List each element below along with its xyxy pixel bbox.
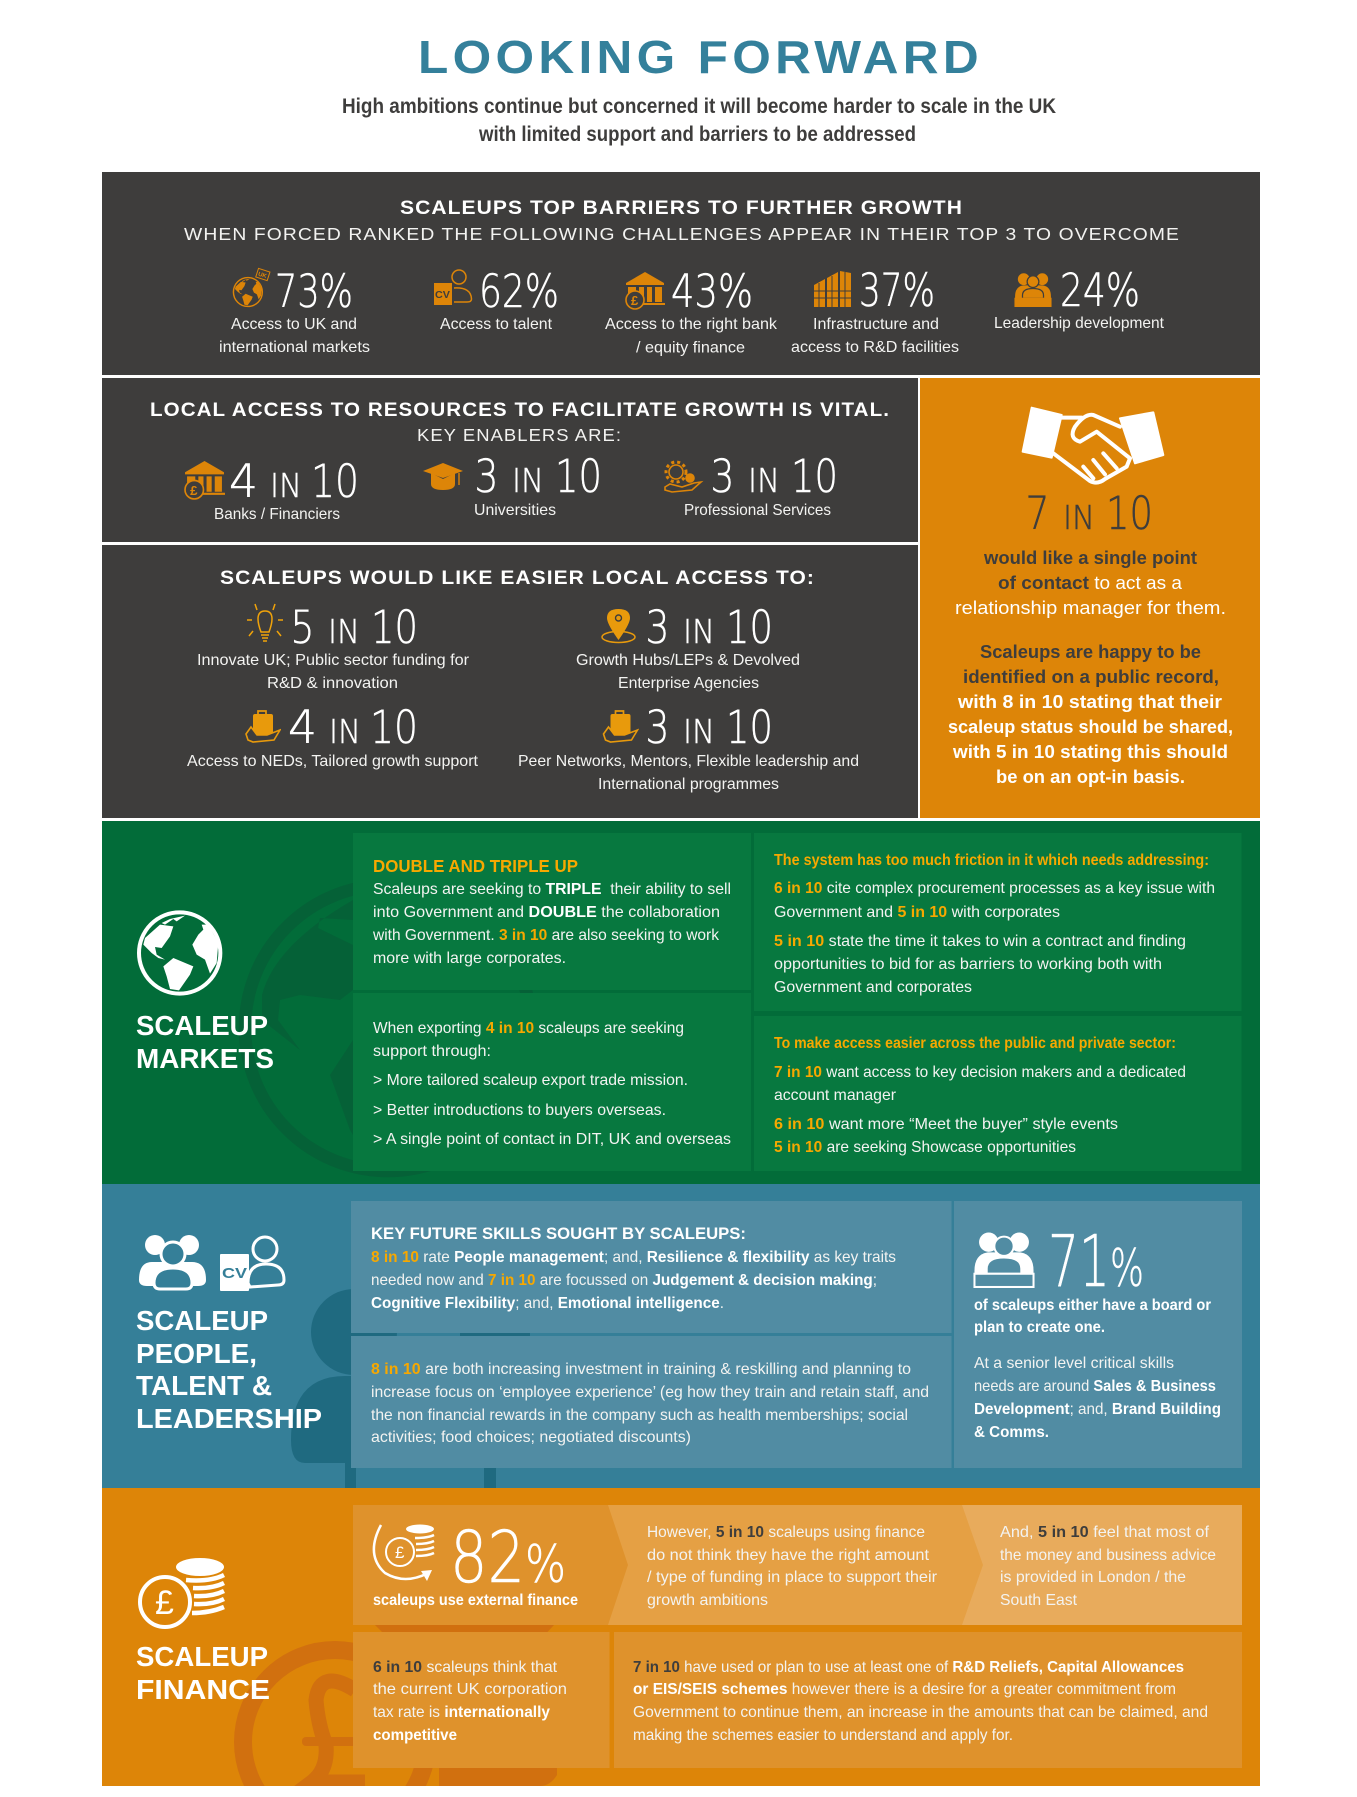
card: London and South East: And, 5 in 10 feel that most of: [1000, 1524, 1210, 1541]
stat: 37% infrastructure: access to R&D facilities: [791, 339, 959, 356]
section: people talent leadership: [102, 1184, 1260, 1488]
stat: 43% finance: Access to the right bank: [605, 316, 778, 333]
card: key future skills: 8 in 10 rate People management; and, Resilience & flexibility as key traits: [371, 1249, 896, 1266]
card: corporation tax: competitive: [373, 1727, 457, 1744]
stat: NEDs: 4: [288, 701, 317, 754]
card: double and triple up: into Government and DOUBLE the collaboration: [373, 904, 720, 921]
stat: universities: [423, 450, 602, 519]
watermark: large globe: [245, 885, 531, 1171]
card: double and triple up: [353, 833, 751, 990]
stat: NEDs: Access to NEDs, Tailored growth support: [187, 753, 479, 770]
stat: innovate UK: Innovate UK; Public sector funding for: [197, 652, 470, 669]
stat: 62% talent: [434, 265, 559, 333]
card: boards 71%: [954, 1201, 1242, 1468]
text: single point of contact: relationship manager for them.: [955, 597, 1226, 618]
stat: growth hubs: IN: [683, 612, 715, 651]
card: R&D reliefs: 7 in 10 have used or plan to use at least one of R&D Reliefs, Capital Allowances: [633, 1659, 1184, 1676]
stat: peer networks: 3: [646, 701, 670, 754]
stat: 37% infrastructure: 37%: [859, 264, 935, 317]
icon: board people: [974, 1233, 1034, 1287]
stat: 43% finance: / equity finance: [636, 340, 745, 356]
heading: scaleup finance: SCALEUP: [136, 1641, 268, 1672]
icon: leadership people: [1015, 273, 1051, 306]
icon: graduation cap: [423, 463, 463, 490]
heading: scaleup markets: MARKETS: [136, 1043, 274, 1074]
icon: bank: [626, 272, 665, 309]
card: right amount of funding: growth ambitions: [647, 1592, 768, 1609]
icon: globe with UK flag: UK: [257, 272, 268, 280]
card: double and triple up: Scaleups are seeking to TRIPLE their ability to sell: [373, 881, 731, 898]
stat: NEDs: [187, 701, 479, 770]
panel: top barriers: [102, 172, 1260, 375]
stat: innovate UK: IN: [328, 612, 360, 651]
text: single point of contact: [955, 547, 1226, 618]
card: corporation tax: tax rate is internationally: [373, 1704, 550, 1721]
section: scaleup markets: [102, 821, 1260, 1184]
icon: CV and person: CV: [435, 290, 450, 301]
card: exporting: support through:: [373, 1043, 491, 1060]
stat: 37% infrastructure: [791, 264, 959, 356]
card: making access easier: 5 in 10 are seeking Showcase opportunities: [774, 1139, 1076, 1156]
stat: peer networks: 10: [726, 701, 773, 754]
stat: innovate UK: [197, 601, 470, 692]
stat: professional services: Professional Services: [684, 502, 831, 519]
stat: professional services: [665, 450, 838, 519]
text: single point of contact: of contact to act as a: [998, 572, 1183, 593]
heading: scaleup finance: [136, 1641, 270, 1705]
stat: peer networks: IN: [683, 712, 715, 751]
stat: growth hubs: [576, 601, 800, 692]
stat: growth hubs: 10: [726, 601, 773, 654]
stat: peer networks: International programmes: [598, 776, 779, 793]
card: system friction: opportunities to bid for as barriers to working both with: [774, 956, 1162, 973]
card: double and triple up: with Government. 3 in 10 are also seeking to work: [372, 927, 720, 944]
stat: 7 in 10: IN: [1063, 498, 1095, 537]
icon: gears and hand: [665, 462, 701, 492]
watermark: pound coin: [243, 1625, 557, 1797]
subheading: top barriers: WHEN FORCED RANKED THE FOLLOWING CHALLENGES APPEAR IN THEIR TOP 3 TO OVERCOME: [184, 224, 1180, 244]
heading: people talent leadership: TALENT &: [136, 1370, 272, 1401]
stat: professional services: IN: [748, 461, 780, 500]
stat: innovate UK: R&D & innovation: [267, 675, 398, 692]
card: corporation tax: 6 in 10 scaleups think that: [373, 1659, 558, 1676]
stat: banks: [185, 455, 359, 523]
card: key future skills: needed now and 7 in 10 are focussed on Judgement & decision making;: [371, 1272, 877, 1289]
watermark: person silhouette: [291, 1289, 530, 1488]
card: corporation tax: [353, 1632, 610, 1768]
title: LOOKING FORWARD: [418, 31, 983, 83]
subtitle: High ambitions continue but concerned it will become harder to scale in the UK: [342, 95, 1056, 118]
card: double and triple up: more with large corporates.: [373, 950, 566, 967]
card: key future skills: [351, 1201, 952, 1333]
stat: professional services: 10: [791, 450, 838, 503]
card: right amount of funding: do not think they have the right amount: [647, 1547, 930, 1564]
stat: 73% markets: [219, 265, 370, 356]
stat: professional services: 3: [710, 450, 734, 503]
card: training and reskilling: increase focus on ‘employee experience’ (eg how they train and retain staff, and: [371, 1384, 929, 1401]
icon: buildings: [814, 271, 851, 307]
card: exporting: When exporting 4 in 10 scaleups are seeking: [373, 1020, 684, 1037]
icon: CV and person: [220, 1237, 284, 1291]
card: boards 71%: 71%: [1048, 1220, 1144, 1303]
card: exporting: > Better introductions to buyers overseas.: [373, 1102, 666, 1119]
stat: NEDs: 10: [370, 701, 418, 754]
icon: globe: [139, 912, 220, 994]
card: system friction: 6 in 10 cite complex procurement processes as a key issue with: [774, 880, 1215, 897]
icon: pound and coin stack: [140, 1558, 224, 1627]
heading: easier local access: SCALEUPS WOULD LIKE EASIER LOCAL ACCESS TO:: [220, 567, 815, 589]
text: public record: scaleup status should be shared,: [948, 716, 1233, 737]
heading: people talent leadership: [136, 1305, 322, 1434]
text: public record: [948, 641, 1233, 787]
text: public record: Scaleups are happy to be: [980, 641, 1201, 662]
subheading: key enablers: KEY ENABLERS ARE:: [417, 425, 622, 445]
stat: 73% markets: international markets: [219, 339, 370, 356]
card: training and reskilling: [351, 1336, 952, 1468]
card: key future skills: Cognitive Flexibility; and, Emotional intelligence.: [371, 1295, 724, 1312]
card: R&D reliefs: making the schemes easier to understand and apply for.: [633, 1727, 1013, 1744]
stat: 24% leadership: [994, 264, 1165, 332]
icon: globe with UK flag: [233, 268, 270, 306]
stat: universities: IN: [512, 461, 544, 500]
card: system friction: [754, 833, 1242, 1011]
heading: top barriers: SCALEUPS TOP BARRIERS TO FURTHER GROWTH: [400, 197, 963, 219]
stat: innovate UK: 10: [371, 601, 418, 654]
stat: 24% leadership: 24%: [1060, 264, 1140, 317]
text: single point of contact: would like a single point: [983, 547, 1197, 568]
card: making access easier: 7 in 10 want access to key decision makers and a dedicated: [774, 1064, 1186, 1081]
icon: briefcase on hand: [246, 711, 280, 742]
card: system friction: The system has too much friction in it which needs addressing:: [774, 852, 1209, 869]
card: boards 71%: plan to create one.: [974, 1319, 1105, 1336]
card: training and reskilling: the non financial rewards in the company such as health memberships; social: [371, 1407, 908, 1424]
stat: 7 in 10: [1026, 487, 1153, 540]
icon: pound and coins cycle: £: [395, 1543, 405, 1562]
icon: bank: [185, 461, 225, 499]
panel: single point of contact: [920, 378, 1260, 818]
stat: 24% leadership: Leadership development: [994, 315, 1165, 332]
card: making access easier: To make access easier across the public and private sector:: [774, 1035, 1176, 1052]
card: training and reskilling: 8 in 10 are both increasing investment in training & reskilling and planning to: [371, 1361, 911, 1378]
card: corporation tax: the current UK corporation: [373, 1681, 567, 1698]
card: making access easier: 6 in 10 want more “Meet the buyer” style events: [774, 1116, 1118, 1133]
icon: map pin: [602, 609, 635, 642]
heading: people talent leadership: LEADERSHIP: [136, 1403, 322, 1434]
subtitle: [342, 95, 1056, 146]
card: 82% external finance: 82%: [450, 1516, 566, 1599]
heading: scaleup markets: [136, 1010, 274, 1074]
stat: innovate UK: 5: [290, 601, 314, 654]
icon: light bulb: [247, 604, 283, 641]
card: right amount of funding: / type of funding in place to support their: [647, 1569, 938, 1586]
card: London and South East: is provided in London / the: [1000, 1569, 1186, 1586]
stat: growth hubs: Growth Hubs/LEPs & Devolved: [576, 652, 800, 669]
stat: NEDs: IN: [329, 712, 361, 751]
stat: growth hubs: Enterprise Agencies: [618, 675, 759, 692]
text: public record: be on an opt-in basis.: [996, 766, 1185, 787]
heading: people talent leadership: PEOPLE,: [136, 1338, 257, 1369]
stat: banks: IN: [270, 466, 302, 505]
heading: local access: LOCAL ACCESS TO RESOURCES TO FACILITATE GROWTH IS VITAL.: [150, 399, 890, 421]
stat: 37% infrastructure: Infrastructure and: [813, 316, 939, 333]
stat: banks: Banks / Financiers: [214, 506, 340, 523]
stat: universities: 10: [555, 450, 602, 503]
text: public record: identified on a public record,: [963, 666, 1219, 687]
text: public record: with 8 in 10 stating that their: [957, 691, 1222, 712]
card: boards 71%: At a senior level critical skills: [974, 1355, 1174, 1372]
card: London and South East: South East: [1000, 1592, 1078, 1609]
card: making access easier: [754, 1016, 1242, 1171]
card: exporting: > A single point of contact in DIT, UK and overseas: [373, 1131, 731, 1148]
card: 82% external finance: [353, 1505, 628, 1625]
icon: people group: [139, 1235, 206, 1289]
card: double and triple up: DOUBLE AND TRIPLE UP: [373, 856, 578, 876]
card: London and South East: the money and business advice: [1000, 1547, 1216, 1564]
stat: 43% finance: 43%: [671, 265, 753, 318]
text: public record: with 5 in 10 stating this should: [952, 741, 1228, 762]
card: system friction: Government and 5 in 10 with corporates: [774, 904, 1060, 921]
heading: scaleup finance: FINANCE: [136, 1674, 270, 1705]
icon: handshake: [1023, 408, 1163, 483]
card: R&D reliefs: or EIS/SEIS schemes however there is a desire for a greater commitment from: [633, 1681, 1176, 1698]
card: exporting: > More tailored scaleup export trade mission.: [373, 1072, 688, 1089]
stat: 62% talent: Access to talent: [440, 316, 553, 333]
stat: peer networks: Peer Networks, Mentors, Flexible leadership and: [518, 753, 859, 770]
card: boards 71%: & Comms.: [974, 1424, 1049, 1441]
card: making access easier: account manager: [774, 1087, 897, 1104]
stat: banks: 4: [229, 455, 258, 508]
card: key future skills: KEY FUTURE SKILLS SOUGHT BY SCALEUPS:: [371, 1225, 746, 1243]
panel: key enablers: [102, 378, 918, 542]
stat: 7 in 10: 10: [1106, 487, 1153, 540]
card: right amount of funding: [600, 1505, 983, 1625]
card: R&D reliefs: [614, 1632, 1242, 1768]
stat: 73% markets: 73%: [275, 265, 353, 318]
card: boards 71%: of scaleups either have a board or: [974, 1297, 1211, 1314]
card: R&D reliefs: Government to continue them, an increase in the amounts that can be claimed, and: [633, 1704, 1208, 1721]
section: scaleup finance: [102, 1488, 1260, 1797]
panel: easier local access: [102, 545, 918, 818]
stat: 62% talent: 62%: [479, 265, 559, 318]
card: system friction: Government and corporates: [774, 979, 972, 996]
card: boards 71%: Development; and, Brand Building: [974, 1401, 1221, 1418]
heading: scaleup markets: SCALEUP: [136, 1010, 268, 1041]
heading: people talent leadership: SCALEUP: [136, 1305, 268, 1336]
card: boards 71%: needs are around Sales & Business: [974, 1378, 1216, 1395]
stat: peer networks: [518, 701, 859, 793]
stat: 43% finance: [605, 265, 778, 356]
icon: pound and coins cycle: [374, 1524, 434, 1581]
stat: 73% markets: Access to UK and: [231, 316, 357, 333]
card: exporting: [353, 993, 751, 1171]
card: London and South East: [950, 1505, 1242, 1625]
card: right amount of funding: However, 5 in 10 scaleups using finance: [647, 1524, 925, 1541]
stat: growth hubs: 3: [646, 601, 670, 654]
stat: 7 in 10: 7: [1026, 487, 1050, 540]
card: training and reskilling: activities; food choices; negotiated discounts): [371, 1429, 691, 1446]
icon: CV and person: CV: [222, 1265, 247, 1282]
stat: banks: 10: [311, 455, 359, 508]
card: system friction: 5 in 10 state the time it takes to win a contract and finding: [774, 933, 1186, 950]
card: 82% external finance: scaleups use external finance: [373, 1592, 578, 1609]
icon: pound and coin stack: £: [155, 1584, 174, 1622]
stat: universities: Universities: [474, 502, 556, 519]
icon: briefcase on hand: [604, 711, 638, 742]
subtitle: with limited support and barriers to be addressed: [478, 123, 916, 146]
stat: universities: 3: [474, 450, 498, 503]
